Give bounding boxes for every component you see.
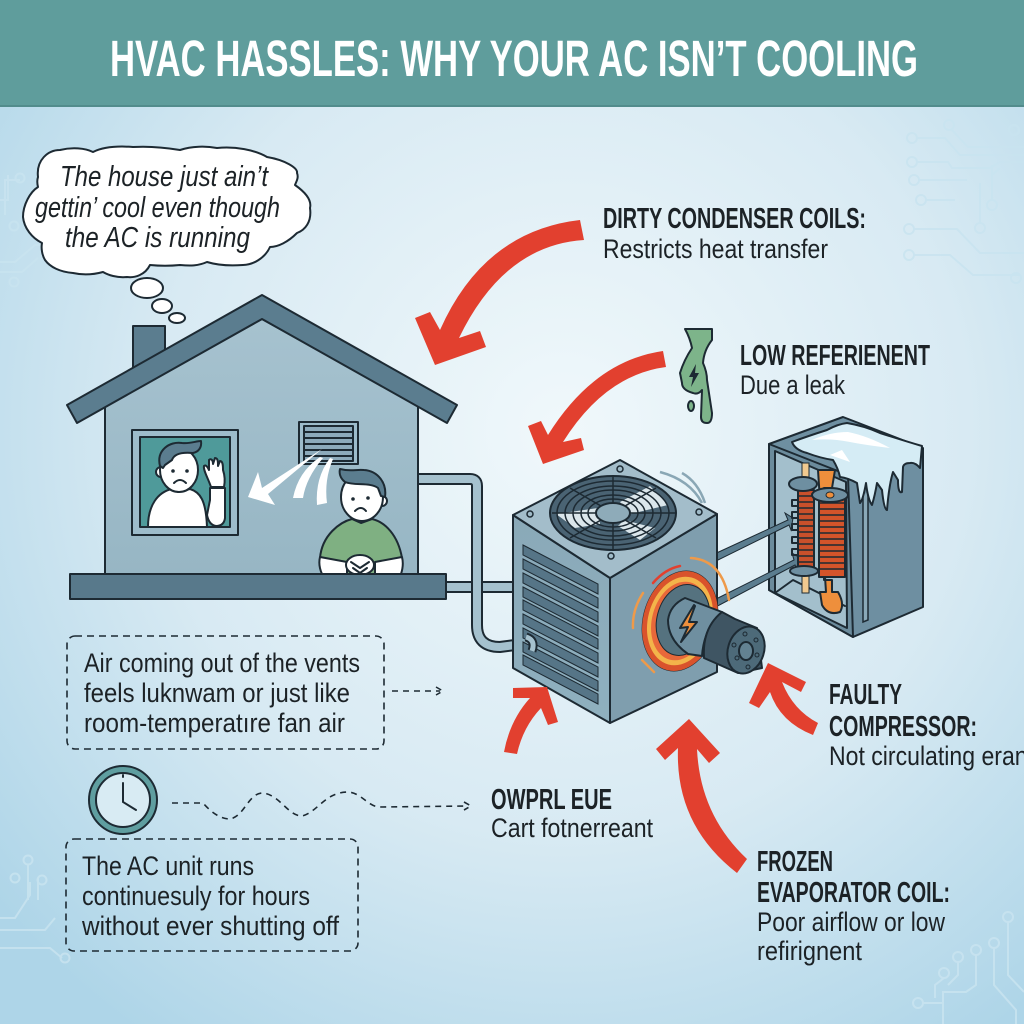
label: dirty condenser coils: Restricts heat transfer bbox=[603, 234, 828, 264]
house wall bbox=[105, 319, 418, 575]
house bbox=[67, 295, 457, 599]
fan bbox=[550, 476, 676, 550]
label: low refrigerant: Due a leak bbox=[740, 370, 845, 400]
wavy dashed arrow bbox=[172, 792, 471, 819]
outdoor AC unit bbox=[513, 460, 771, 723]
label: dirty condenser coils bbox=[603, 203, 866, 264]
coil left bbox=[789, 463, 818, 593]
label: owprl eue: Cart fotnerreant bbox=[491, 813, 653, 843]
person in front of house bbox=[319, 469, 403, 575]
label: dirty condenser coils: DIRTY CONDENSER COILS: bbox=[603, 203, 866, 235]
dashed arrow bbox=[392, 687, 443, 695]
base slab bbox=[70, 574, 446, 599]
vent bbox=[299, 422, 358, 464]
chimney bbox=[133, 326, 165, 376]
label: frozen evaporator coil bbox=[757, 846, 950, 966]
callout: lukewarm air: feels luknwam or just like bbox=[84, 678, 350, 708]
red arrow: dirty condenser coils bbox=[415, 220, 584, 365]
thought bubble: the AC is running bbox=[65, 222, 250, 254]
label: faulty compressor: FAULTY bbox=[829, 679, 902, 711]
thought bubble: The house just ain’t bbox=[60, 161, 270, 193]
title banner bbox=[0, 0, 1024, 107]
tubes to evaporator bbox=[710, 513, 800, 610]
thought bubble bbox=[23, 147, 310, 323]
red arrow: outdoor unit issue bbox=[504, 687, 558, 754]
callout: lukewarm air: room-temperatıre fan air bbox=[84, 708, 345, 738]
compressor bbox=[631, 558, 771, 680]
coil right bbox=[812, 470, 848, 613]
label: faulty compressor bbox=[829, 679, 1024, 771]
side slots bbox=[523, 545, 598, 704]
pipes from house to outdoor unit bbox=[418, 479, 530, 647]
callout: runs continuously: The AC unit runs bbox=[82, 851, 254, 881]
callout: lukewarm air: Air coming out of the vents bbox=[84, 648, 360, 678]
cool air arrow bbox=[248, 449, 333, 505]
icon: refrigerant leak bbox=[680, 329, 712, 423]
evaporator unit bbox=[710, 417, 923, 637]
roof bbox=[67, 295, 457, 423]
callout: runs continuously: continuesuly for hours bbox=[82, 881, 310, 911]
red arrow: frozen evaporator coil bbox=[656, 719, 747, 873]
label: owprl eue: OWPRL EUE bbox=[491, 784, 612, 816]
label: frozen evaporator coil: FROZEN bbox=[757, 846, 833, 878]
red arrow: faulty compressor bbox=[749, 663, 818, 735]
icon: clock bbox=[89, 766, 157, 834]
ice on top bbox=[792, 423, 922, 510]
window with person bbox=[132, 430, 238, 535]
pipe collar bbox=[526, 637, 533, 651]
callout: lukewarm air bbox=[67, 636, 384, 749]
label: low refrigerant: LOW REFERIENENT bbox=[740, 340, 930, 372]
callout: runs continuously bbox=[66, 839, 358, 951]
label: owprl eue bbox=[491, 784, 653, 843]
label: low refrigerant bbox=[740, 340, 930, 400]
label: frozen evaporator coil: refirignent bbox=[757, 936, 862, 966]
label: frozen evaporator coil: Poor airflow or low bbox=[757, 907, 945, 937]
red arrow: low refrigerant bbox=[528, 351, 666, 464]
thought bubble: gettin’ cool even though bbox=[35, 192, 280, 224]
callout: runs continuously: without ever shutting off bbox=[81, 911, 339, 941]
